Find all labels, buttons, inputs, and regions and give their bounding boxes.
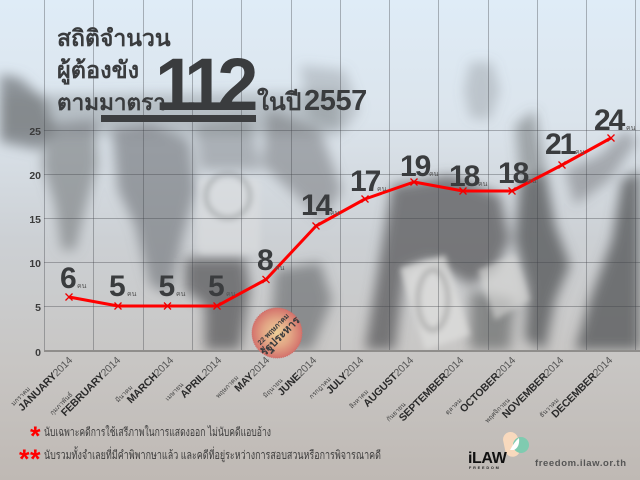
logo: iLaw Freedom bbox=[468, 431, 529, 470]
month labels: FEBRUARY2014 bbox=[59, 354, 123, 419]
value labels: 18 bbox=[498, 157, 529, 190]
callout: coup 22 May: รัฐประหาร bbox=[258, 314, 303, 359]
month labels: กุมภาพันธ์ bbox=[48, 391, 74, 417]
placards bbox=[198, 174, 530, 350]
value labels: คน bbox=[330, 210, 340, 217]
month labels: มิถุนายน bbox=[261, 376, 285, 400]
value labels: คน bbox=[626, 125, 636, 132]
month labels: JUNE2014 bbox=[275, 354, 319, 398]
month labels: สิงหาคม bbox=[348, 388, 370, 410]
month labels: กันยายน bbox=[385, 400, 408, 423]
title bbox=[57, 25, 367, 126]
footnote 1: นับเฉพาะคดีการใช้เสรีภาพในการแสดงออก ไม่นับคดีแอบอ้าง bbox=[44, 425, 271, 439]
month labels: กรกฎาคม bbox=[308, 376, 333, 401]
logo: iLaw Freedom: iLAW bbox=[468, 450, 508, 467]
value labels: 14 bbox=[301, 189, 333, 222]
value labels: 21 bbox=[545, 128, 576, 161]
month labels: เมษายน bbox=[164, 381, 186, 403]
y axis labels: 20 bbox=[29, 170, 41, 182]
value labels: 5 bbox=[158, 270, 174, 303]
month labels: MAY2014 bbox=[232, 354, 272, 394]
line chart: prisoners per month bbox=[66, 134, 614, 310]
value labels: 5 bbox=[208, 270, 224, 303]
title: ผู้ต้องขัง bbox=[57, 57, 139, 85]
y axis labels: 15 bbox=[29, 214, 41, 226]
month labels: MARCH2014 bbox=[125, 354, 176, 406]
month labels: SEPTEMBER2014 bbox=[397, 354, 466, 424]
y axis labels: 0 bbox=[35, 347, 41, 359]
value labels: คน bbox=[77, 283, 87, 290]
x axis bbox=[44, 350, 640, 352]
value labels: คน bbox=[575, 149, 585, 156]
month labels: มกราคม bbox=[10, 386, 32, 408]
footnote 1 bbox=[30, 421, 271, 451]
value labels: 17 bbox=[350, 165, 381, 198]
website url: freedom.ilaw.or.th bbox=[535, 458, 626, 469]
title: 112 bbox=[155, 43, 256, 126]
value labels: คน bbox=[127, 291, 137, 298]
month labels: DECEMBER2014 bbox=[549, 354, 615, 420]
month labels: พฤศจิกายน bbox=[483, 396, 512, 425]
month labels: ตุลาคม bbox=[444, 397, 464, 417]
value labels: คน bbox=[226, 291, 236, 298]
value labels: 5 bbox=[109, 270, 125, 303]
y axis labels bbox=[29, 126, 41, 359]
blurred protest photo bbox=[0, 62, 640, 350]
month labels bbox=[10, 349, 615, 432]
month labels: พฤษภาคม bbox=[215, 374, 240, 400]
value labels: คน bbox=[527, 178, 537, 185]
value labels: คน bbox=[275, 265, 285, 272]
y axis labels: 5 bbox=[35, 302, 41, 314]
footnote 2: * bbox=[30, 444, 41, 474]
value labels: 24 bbox=[594, 104, 626, 137]
chart grid bbox=[44, 0, 640, 350]
title: ตามมาตรา bbox=[57, 90, 166, 115]
value labels: คน bbox=[176, 291, 186, 298]
month labels: NOVEMBER2014 bbox=[500, 354, 566, 421]
title: 2557 bbox=[304, 85, 367, 117]
value labels: คน bbox=[377, 186, 387, 193]
month labels: มีนาคม bbox=[114, 384, 134, 404]
value labels bbox=[60, 104, 636, 303]
month labels: ธันวาคม bbox=[538, 396, 561, 419]
footnote 2 bbox=[19, 444, 381, 474]
y axis labels: 10 bbox=[29, 258, 41, 270]
value labels: คน bbox=[478, 181, 488, 188]
logo: iLaw Freedom: FREEDOM bbox=[469, 466, 501, 470]
title: ในปี bbox=[257, 87, 301, 116]
callout: coup 22 May: 22 พฤษภาคม bbox=[257, 313, 291, 347]
month labels: JANUARY2014 bbox=[16, 354, 75, 414]
month labels: AUGUST2014 bbox=[361, 354, 416, 410]
footnote 2: นับรวมทั้งจำเลยที่มีคำพิพากษาแล้ว และคดีที่อยู่ระหว่างการสอบสวนหรือการพิจารณาคดี bbox=[44, 446, 381, 463]
month labels: OCTOBER2014 bbox=[458, 354, 518, 415]
value labels: 6 bbox=[60, 262, 76, 295]
month labels: JULY2014 bbox=[324, 354, 366, 397]
y axis labels: 25 bbox=[29, 126, 41, 138]
title: สถิติจำนวน bbox=[57, 25, 171, 51]
footnote 1: * bbox=[30, 421, 41, 451]
value labels: 19 bbox=[400, 150, 431, 183]
value labels: คน bbox=[429, 171, 439, 178]
value labels: 18 bbox=[449, 160, 480, 193]
value labels: 8 bbox=[257, 244, 273, 277]
month labels: APRIL2014 bbox=[178, 354, 224, 401]
footnote 2: * bbox=[19, 444, 30, 474]
